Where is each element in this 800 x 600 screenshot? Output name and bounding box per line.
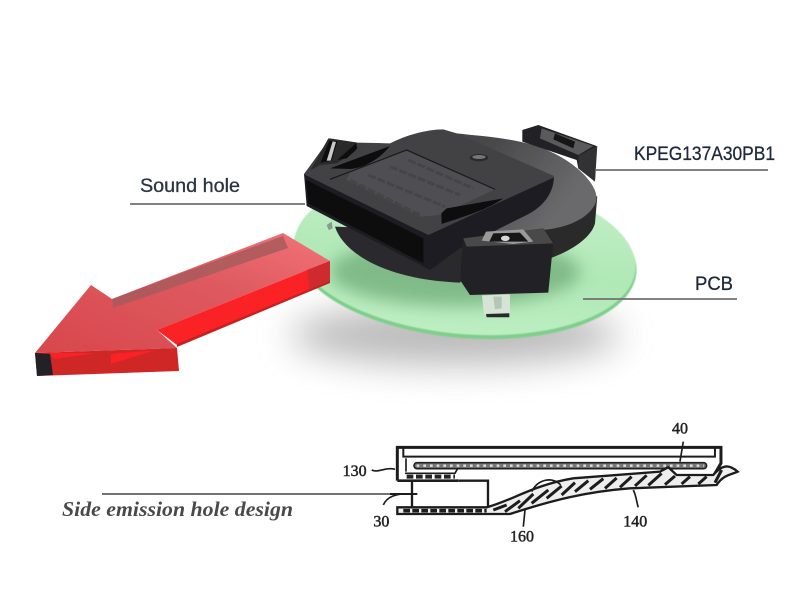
clip, front terminal bbox=[460, 228, 553, 295]
bump 160 bbox=[532, 480, 561, 492]
arrow black tip bbox=[35, 353, 53, 376]
cavity box bbox=[412, 481, 488, 507]
panel edge lines bbox=[330, 150, 495, 189]
screw boss bbox=[470, 154, 488, 161]
front right wall bbox=[428, 177, 554, 270]
moulded text marks bbox=[350, 160, 473, 215]
clip, upper left bbox=[311, 138, 357, 170]
solder leg, front bbox=[482, 294, 510, 315]
label: Sound hole: Sound hole bbox=[140, 176, 240, 197]
upper housing outline bbox=[397, 447, 721, 481]
battery holder component bbox=[304, 125, 597, 317]
sound hole opening bbox=[306, 180, 423, 263]
label: KPEG137A30PB1: KPEG137A30PB1 bbox=[634, 144, 775, 165]
hatched housing piece, left bbox=[407, 471, 455, 483]
arrow shaft end bbox=[307, 261, 330, 290]
hatched strip bbox=[414, 463, 707, 469]
label: PCB: PCB bbox=[695, 274, 733, 295]
arrow shaft side bbox=[157, 261, 330, 345]
numerals: 30 bbox=[373, 514, 389, 531]
numerals: 140 bbox=[623, 514, 647, 531]
arrow shaft underside edge bbox=[177, 281, 330, 347]
inner top plate bbox=[304, 130, 554, 235]
slot, upper left bbox=[330, 146, 390, 169]
round body top bbox=[304, 129, 597, 245]
slot, lower right bbox=[441, 198, 503, 224]
numerals: 40 bbox=[672, 420, 688, 437]
round base under the holder bbox=[335, 227, 493, 283]
leader lines bbox=[372, 442, 683, 527]
arrow inner shade bbox=[112, 236, 288, 308]
caption: side emission hole design: Side emission hole design bbox=[62, 497, 293, 521]
drop shadow under PCB bbox=[290, 305, 620, 365]
front face with sound hole bbox=[304, 174, 430, 270]
lower hatched plate bbox=[397, 466, 738, 514]
arrow top face bbox=[35, 233, 330, 353]
battery window panel bbox=[347, 150, 495, 217]
arrow head side bbox=[35, 348, 179, 376]
PCB disc bbox=[287, 161, 643, 353]
hatching bbox=[403, 505, 487, 516]
arrow head bright facets bbox=[50, 353, 92, 359]
round body side bbox=[427, 173, 597, 270]
metal contact bbox=[482, 229, 533, 244]
solder leg, left bbox=[327, 222, 333, 230]
red arrow bbox=[35, 233, 330, 376]
patent cross-section diagram bbox=[343, 420, 738, 546]
numerals: 130 bbox=[343, 463, 367, 480]
shadow of the holder on the PCB bbox=[330, 238, 580, 306]
numerals bbox=[343, 420, 688, 546]
clip, upper right bbox=[522, 125, 597, 182]
entry arrow line bbox=[390, 491, 417, 497]
numerals: 160 bbox=[510, 529, 534, 546]
